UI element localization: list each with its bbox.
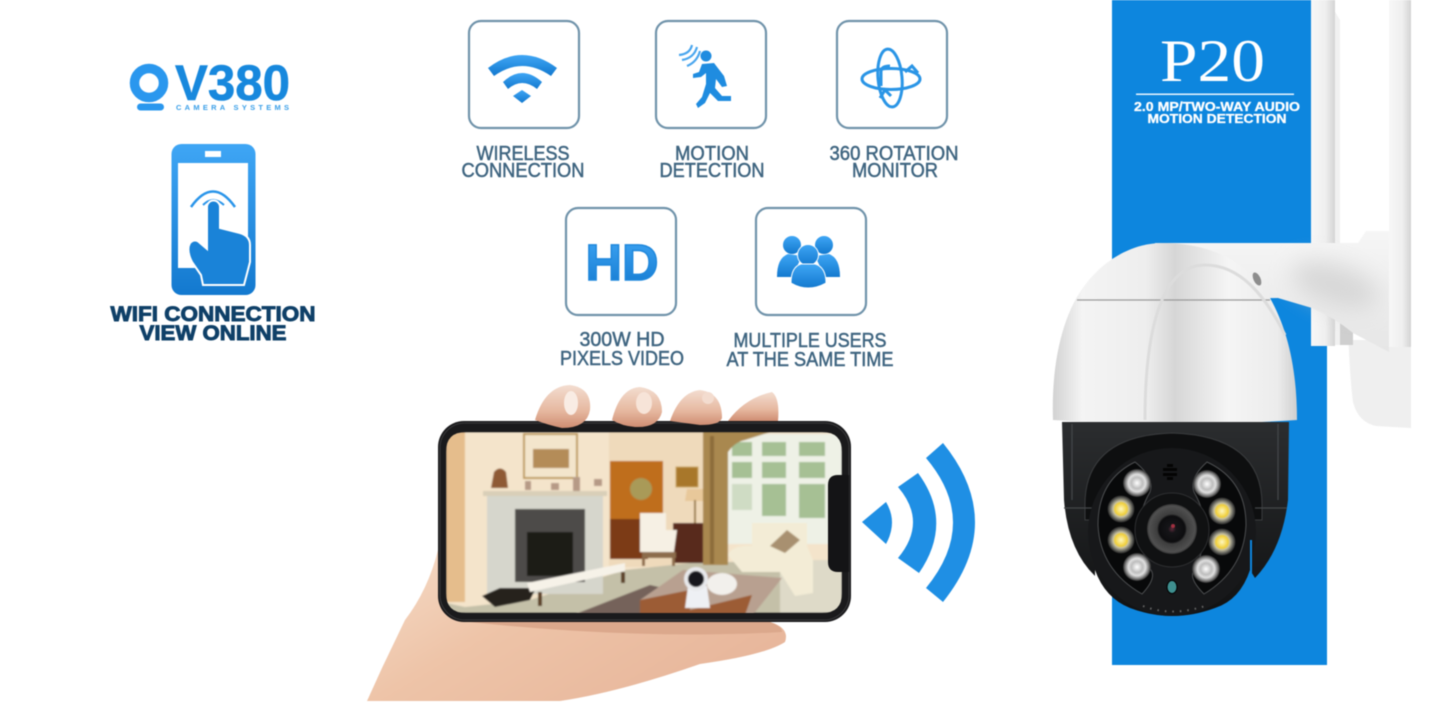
room scene on screen	[446, 432, 842, 615]
camera dome	[1053, 243, 1297, 424]
icon: phone with tapping hand	[172, 144, 256, 295]
feature: multiple users: MULTIPLE USERS	[734, 330, 886, 352]
icon: wifi	[488, 55, 557, 103]
small picture	[676, 467, 698, 487]
black camera body	[1062, 422, 1289, 616]
feature: 360 rotation monitor: 360 ROTATION	[830, 143, 958, 165]
icon: users	[777, 236, 840, 288]
spec text	[1134, 99, 1300, 126]
feature: 300W HD pixels video: PIXELS VIDEO	[560, 348, 684, 370]
armchair	[640, 513, 677, 552]
rug	[577, 584, 659, 614]
spec text: 2.0 MP/TWO-WAY AUDIO	[1134, 99, 1300, 114]
smartphone with live room view	[438, 421, 851, 622]
model name P20: P20	[1160, 28, 1265, 94]
icon: rotation	[862, 48, 920, 108]
feature: 360 rotation monitor: MONITOR	[852, 160, 938, 182]
feature: motion detection: MOTION	[675, 143, 749, 165]
feature: motion detection	[656, 21, 766, 182]
security camera	[1053, 231, 1411, 616]
heading: wifi connection view online: WIFI CONNECTION	[110, 303, 316, 326]
lamp	[685, 489, 706, 501]
logo: V380 camera systems: CAMERA SYSTEMS	[176, 103, 289, 112]
cabinet	[610, 461, 663, 519]
palm of the hand	[367, 550, 786, 701]
sofa	[728, 523, 813, 596]
icon: wifi signal waves	[862, 443, 975, 602]
lens	[1135, 493, 1209, 567]
front sphere	[1088, 448, 1256, 616]
feature: 300W HD pixels video	[560, 208, 684, 370]
feature: motion detection: DETECTION	[660, 160, 764, 182]
heading: wifi connection view online: VIEW ONLINE	[140, 322, 286, 345]
feature: wireless connection: WIRELESS	[476, 143, 570, 165]
picture	[524, 434, 577, 478]
mantel ornaments	[491, 468, 508, 488]
logo: V380 camera systems: V380	[175, 55, 290, 111]
antennas and wall mount	[1311, 0, 1411, 428]
bench	[527, 563, 625, 592]
feature: 300W HD pixels video: 300W HD	[580, 329, 664, 351]
panel: blue product banner	[1112, 0, 1327, 665]
mini camera	[685, 586, 710, 608]
heading: wifi connection view online	[110, 303, 316, 345]
feature: 360 rotation monitor	[830, 21, 958, 182]
base and ornament	[482, 588, 536, 607]
fingers gripping phone	[535, 385, 778, 428]
icon: HD: HD	[586, 234, 658, 291]
table	[640, 570, 782, 615]
LEDs	[1108, 469, 1236, 583]
floor	[448, 561, 781, 614]
speaker	[1163, 464, 1177, 480]
window	[727, 434, 842, 544]
curtain	[703, 432, 728, 565]
bowl	[707, 573, 737, 595]
camera arm	[1155, 231, 1389, 352]
feature: wireless connection	[462, 21, 584, 182]
spec text: MOTION DETECTION	[1148, 111, 1286, 126]
side table	[673, 523, 705, 563]
feature: multiple users	[726, 208, 894, 371]
feature: multiple users: AT THE SAME TIME	[726, 349, 894, 371]
notch	[828, 475, 849, 572]
feature: wireless connection: CONNECTION	[462, 160, 584, 182]
icon: running man	[679, 45, 731, 108]
fireplace	[483, 491, 607, 496]
